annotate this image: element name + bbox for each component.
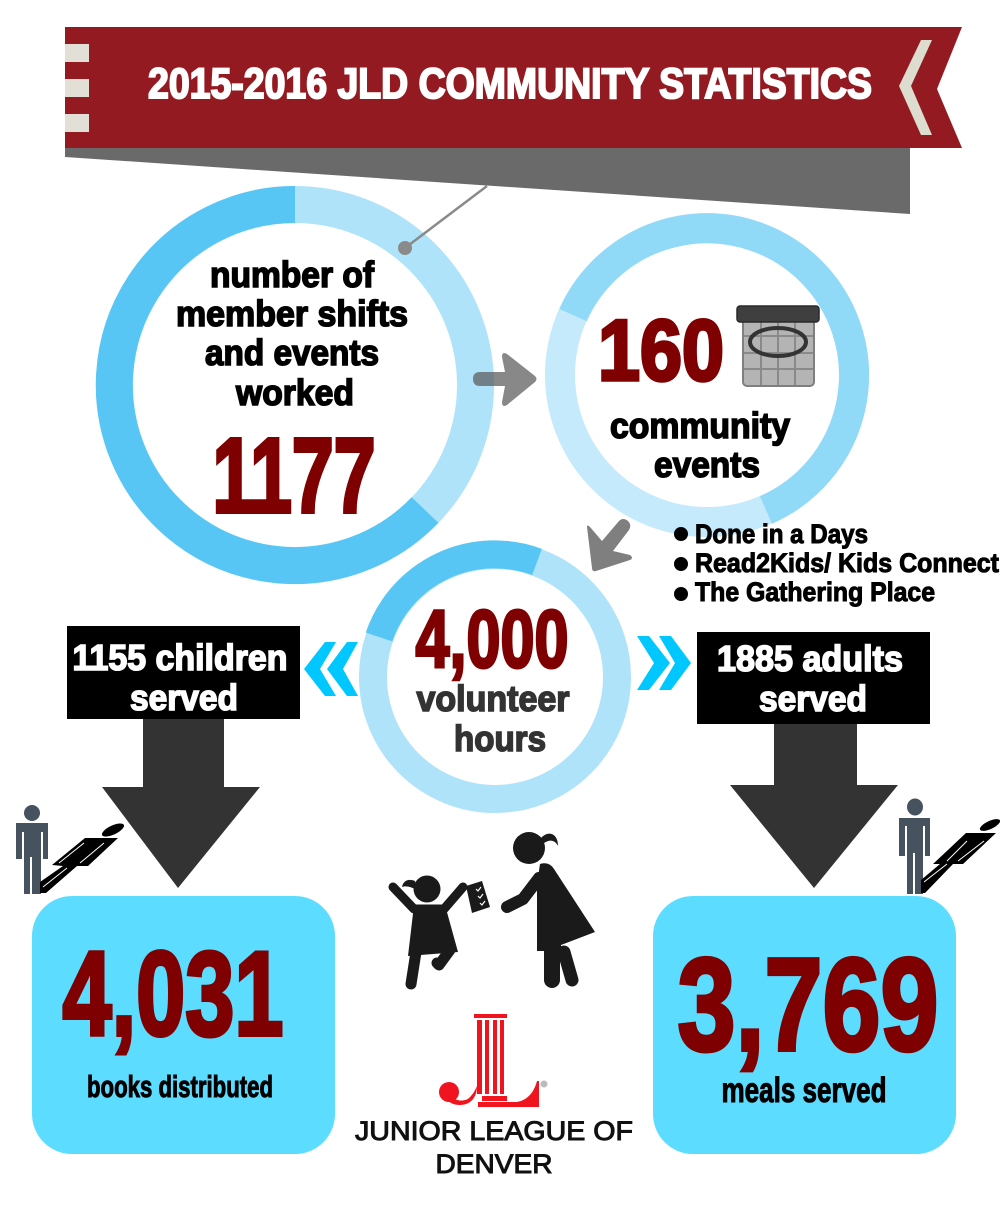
chevrons right	[637, 636, 691, 690]
title banner	[65, 27, 962, 148]
icon: woman and child	[393, 832, 595, 984]
label: adults served	[697, 632, 930, 724]
heading: community events: community	[610, 405, 790, 446]
heading: member shifts text: number of	[210, 254, 375, 295]
label: children served: served	[130, 677, 238, 718]
icon: calendar	[737, 306, 819, 386]
heading: community events: events	[654, 444, 760, 485]
label: adults served: 1885 adults	[717, 638, 903, 679]
heading: member shifts text: and events	[205, 332, 379, 373]
panel: books distributed: books distributed	[87, 1069, 273, 1104]
heading: community events	[610, 405, 790, 485]
heading: member shifts text: member shifts	[176, 293, 408, 334]
number 4,000: 4,000	[416, 594, 568, 685]
arrow down right column	[730, 721, 898, 888]
connector line from banner to ring	[398, 186, 487, 255]
heading: volunteer hours	[416, 678, 570, 759]
banner shadow	[65, 148, 910, 214]
logo text	[355, 1116, 633, 1179]
ring: volunteer hours	[373, 554, 617, 799]
number 160: 160	[598, 303, 724, 399]
panel: meals served: 3,769	[678, 931, 938, 1078]
panel: meals served	[653, 896, 956, 1154]
list of events	[674, 519, 999, 607]
title: 2015-2016 JLD COMMUNITY STATISTICS	[148, 60, 872, 108]
label: adults served: served	[759, 678, 867, 719]
panel: meals served: meals served	[722, 1071, 886, 1110]
panel: books distributed	[32, 896, 335, 1154]
heading: member shifts text: worked	[235, 372, 354, 413]
list of events: Done in a Days	[695, 519, 868, 549]
arrow right	[473, 353, 536, 406]
panel: books distributed: 4,031	[62, 927, 284, 1061]
list of events: The Gathering Place	[695, 577, 935, 607]
ring: community events	[560, 228, 854, 522]
number 1177: 1177	[212, 417, 376, 535]
logo text: JUNIOR LEAGUE OF	[355, 1116, 633, 1146]
arrow down left column	[102, 716, 260, 888]
logo text: DENVER	[436, 1149, 552, 1179]
icon: person with shadow right	[899, 798, 1000, 894]
heading: member shifts text	[176, 254, 408, 413]
label: children served: 1155 children	[72, 637, 288, 678]
heading: volunteer hours: volunteer	[416, 678, 570, 719]
label: children served	[67, 626, 300, 719]
arrow down-left	[587, 519, 632, 571]
heading: volunteer hours: hours	[454, 718, 546, 759]
chevrons left	[304, 642, 358, 696]
logo: Junior League	[439, 1014, 548, 1107]
icon: person with shadow left	[16, 805, 126, 894]
ring: member shifts	[114, 204, 476, 566]
